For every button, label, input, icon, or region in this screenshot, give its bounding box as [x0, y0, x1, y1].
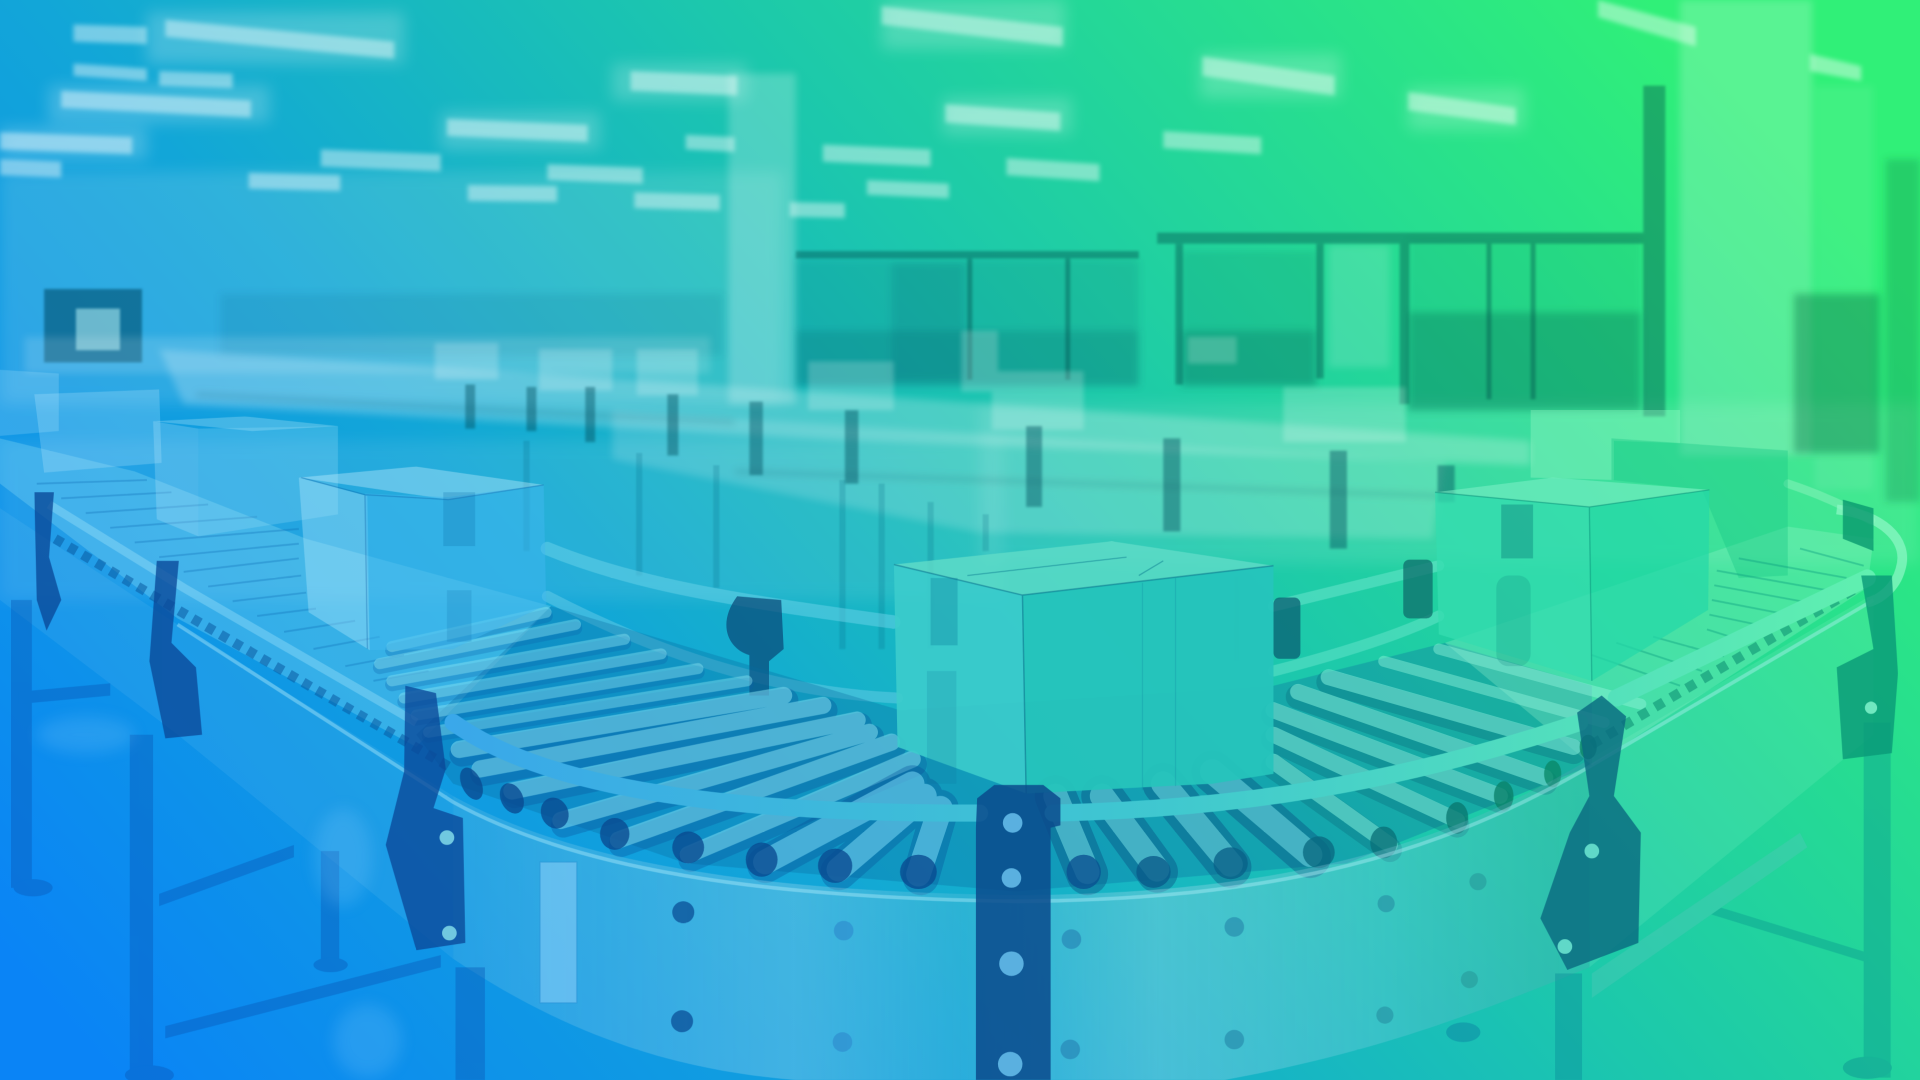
- side panel: right straight section: [1589, 594, 1873, 967]
- background conveyor lines: [24, 337, 1531, 539]
- conveyor roller bed, pale far side: [0, 438, 551, 747]
- conveyor rollers: far left section: [37, 480, 429, 681]
- conveyor support legs: [11, 600, 1892, 1080]
- curved metal side panel: [453, 759, 1589, 1080]
- left guide rail: [49, 504, 416, 722]
- ceiling lights: [0, 0, 1861, 218]
- background legs: [527, 441, 1237, 661]
- box 3: left: [153, 416, 338, 536]
- white label on the panel: [540, 862, 577, 1003]
- panel bolts: [671, 873, 1487, 1059]
- inner guide rails: [547, 484, 1871, 698]
- distant boxes and clutter: [435, 331, 1406, 442]
- wall and floor haze: [0, 171, 1920, 600]
- vertical posts and clamps: left: [34, 492, 465, 950]
- rail highlight above the metal panel: [178, 600, 1873, 901]
- central guide rail: [453, 578, 1867, 813]
- structural pillars: [729, 0, 1873, 490]
- conveyor rollers: near left section: [459, 696, 940, 877]
- side panel: left straight section: [0, 508, 453, 959]
- box 2: near left: [299, 467, 546, 650]
- box 1: central large: [894, 541, 1273, 793]
- conveyor rollers: mid left section: [380, 612, 747, 736]
- vertical posts and clamps: right: [1540, 500, 1898, 970]
- machinery window frames: [796, 86, 1665, 416]
- far right boxes: [1531, 410, 1788, 578]
- conveyor roller bed, pale right side: [1445, 527, 1873, 765]
- curved end of far-right rail: [1837, 509, 1902, 602]
- roller end caps along the outer edge: [455, 735, 1597, 889]
- ceiling glow around the lights: [0, 0, 1524, 159]
- conveyor roller bed, dark near side: [416, 606, 1592, 891]
- box 4: near right: [1435, 478, 1709, 681]
- floor reflections: [37, 716, 402, 1078]
- outer edge chain: [55, 539, 1867, 769]
- background support brackets: [465, 384, 1455, 549]
- conveyor rollers: far right section: [1592, 549, 1864, 686]
- central bracket: [976, 785, 1060, 1080]
- far left boxes: [0, 370, 162, 473]
- background machinery on the right: [220, 159, 1920, 502]
- clamp bolts: [440, 702, 1877, 954]
- far wall dark sign: [44, 289, 142, 362]
- conveyor rollers: near right section: [1056, 649, 1641, 874]
- inner rail brackets: [726, 560, 1433, 696]
